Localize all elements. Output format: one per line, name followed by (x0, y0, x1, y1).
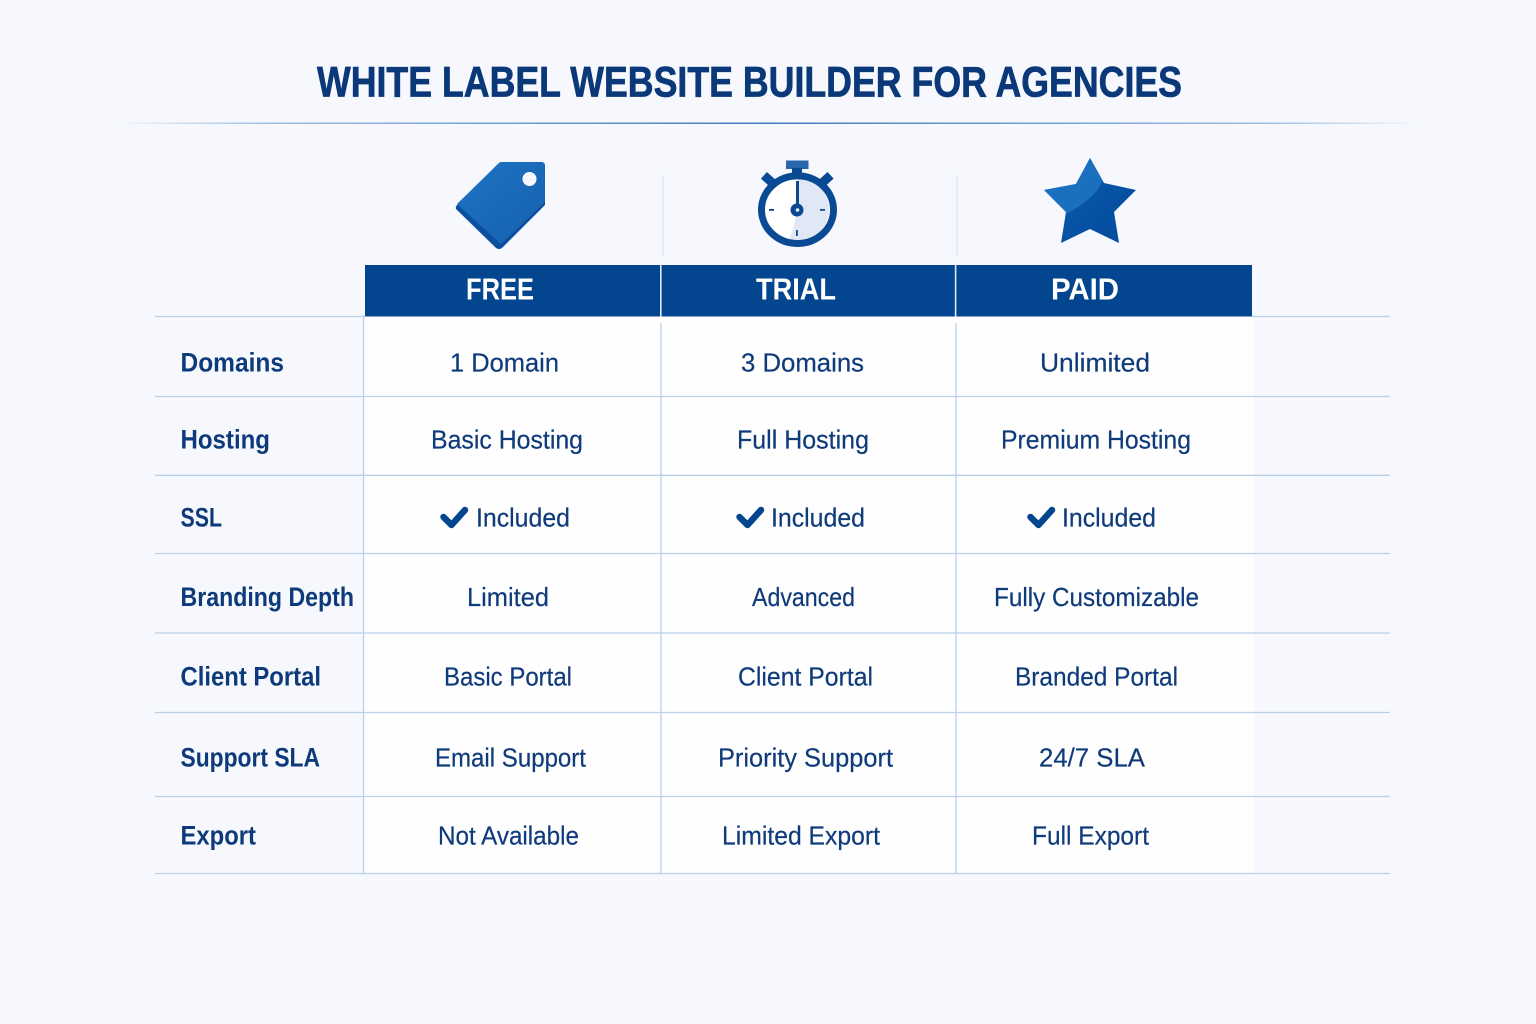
row: domains: 3 Domains (741, 348, 864, 378)
row: branding depth: Advanced (752, 582, 855, 612)
row: ssl (180, 502, 1156, 532)
icon: star (1044, 158, 1136, 243)
row: support sla: Email Support (435, 742, 587, 772)
icon: check paid (1030, 510, 1052, 525)
icon: price tag (456, 162, 545, 249)
row: domains: Unlimited (1040, 348, 1150, 378)
row: branding depth: Limited (467, 582, 549, 612)
row: support sla: Priority Support (718, 742, 894, 772)
row: export: Limited Export (722, 820, 881, 850)
row: ssl: Included (1062, 502, 1156, 532)
row: hosting: Premium Hosting (1001, 424, 1191, 454)
row: hosting: Basic Hosting (431, 424, 583, 454)
row: ssl: Included (476, 502, 570, 532)
column header bar (365, 265, 1252, 316)
row: support sla: Support SLA (180, 742, 320, 772)
row: ssl: Included (771, 502, 865, 532)
row: export (180, 820, 1150, 850)
row: branding depth (180, 582, 1199, 612)
row: support sla (180, 742, 1146, 772)
row: support sla: 24/7 SLA (1039, 742, 1146, 772)
row: client portal: Basic Portal (444, 662, 572, 692)
row: domains: 1 Domain (450, 348, 559, 378)
row: hosting (180, 424, 1191, 454)
row: export: Export (180, 820, 256, 850)
icon: stopwatch (761, 160, 834, 244)
row: hosting: Hosting (180, 424, 270, 454)
row: branding depth: Fully Customizable (994, 582, 1199, 612)
row: ssl: SSL (180, 502, 222, 532)
row: client portal: Branded Portal (1015, 662, 1178, 692)
row: export: Not Available (438, 820, 579, 850)
row: client portal (180, 662, 1178, 692)
row: domains: Domains (180, 348, 284, 378)
row: client portal: Client Portal (180, 662, 321, 692)
header: free: FREE (466, 272, 534, 306)
panel: plan columns background (364, 316, 1254, 874)
row: client portal: Client Portal (738, 662, 873, 692)
row: export: Full Export (1032, 820, 1150, 850)
icon: check trial (740, 510, 761, 525)
title: WHITE LABEL WEBSITE BUILDER FOR AGENCIES (317, 58, 1182, 106)
header: trial: TRIAL (756, 272, 836, 306)
row: hosting: Full Hosting (737, 424, 869, 454)
header: paid: PAID (1051, 272, 1119, 306)
row: branding depth: Branding Depth (180, 582, 354, 612)
icon: check free (444, 510, 465, 525)
row: domains (180, 348, 1150, 378)
